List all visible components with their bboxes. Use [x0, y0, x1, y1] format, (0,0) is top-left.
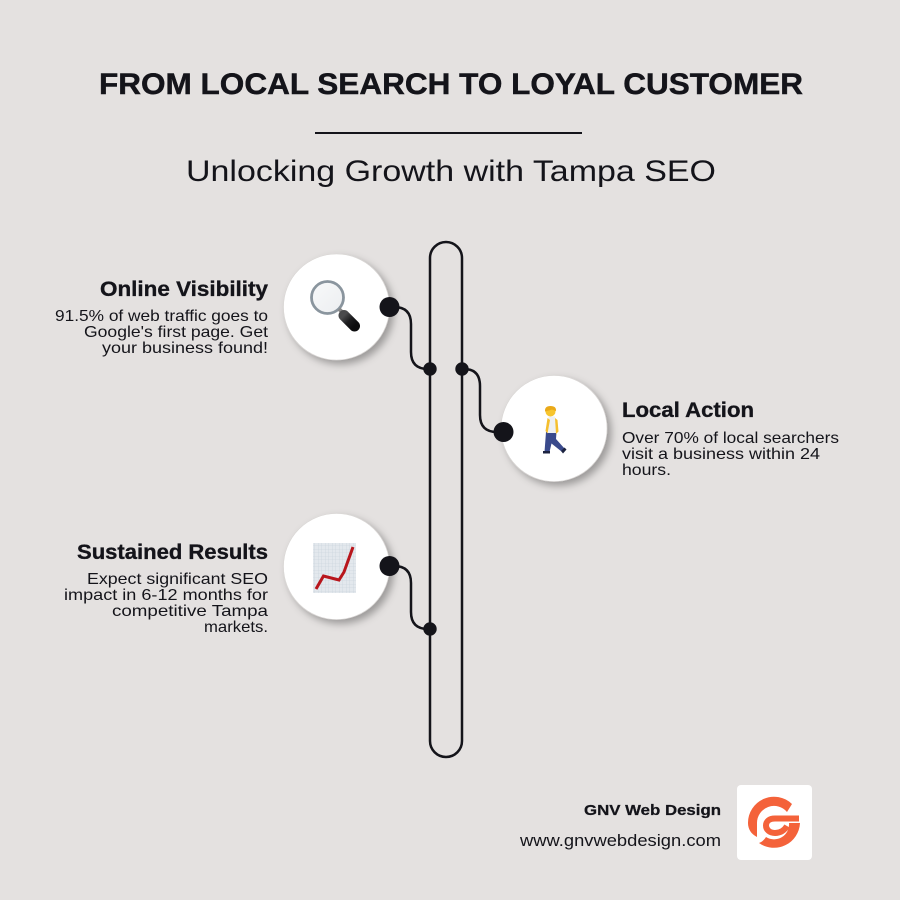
- online visibility text: [55, 308, 269, 357]
- central timeline pill: [430, 242, 462, 757]
- online visibility heading: Online Visibility: [100, 278, 268, 301]
- sustained results text: markets.: [204, 619, 268, 636]
- online visibility circle: [284, 254, 390, 360]
- connector: sustained results: [390, 566, 437, 636]
- local action circle: [501, 376, 607, 482]
- title divider: [315, 132, 582, 134]
- website: www.gnvwebdesign.com: [519, 832, 721, 850]
- brand name: GNV Web Design: [584, 802, 721, 819]
- footer brand: [519, 785, 812, 860]
- icon: magnifying glass: [312, 282, 354, 326]
- online visibility text: 91.5% of web traffic goes to: [55, 308, 268, 325]
- logo tile: [737, 785, 812, 860]
- panel: local action: [494, 376, 839, 482]
- sustained results text: impact in 6-12 months for: [64, 587, 269, 604]
- sustained results circle: [284, 514, 390, 620]
- local action node: [494, 422, 514, 442]
- sustained results text: competitive Tampa: [112, 603, 268, 620]
- online visibility node: [380, 297, 400, 317]
- local action text: hours.: [622, 462, 671, 479]
- panel: online visibility: [55, 254, 400, 360]
- online visibility text: Google's first page. Get: [84, 324, 269, 341]
- icon: G logo: [748, 797, 800, 848]
- sustained results node: [380, 556, 400, 576]
- title: FROM LOCAL SEARCH TO LOYAL CUSTOMER: [99, 68, 803, 101]
- connector: local action: [455, 362, 503, 432]
- local action text: visit a business within 24: [622, 446, 820, 463]
- local action heading: Local Action: [622, 399, 754, 422]
- connector: online visibility: [390, 307, 437, 376]
- panel: sustained results: [64, 514, 400, 636]
- sustained results text: Expect significant SEO: [87, 571, 268, 588]
- icon: chart increasing: [313, 543, 356, 593]
- local action text: [622, 430, 839, 479]
- icon: person walking: [543, 406, 566, 454]
- online visibility text: your business found!: [102, 340, 268, 357]
- sustained results heading: Sustained Results: [77, 541, 268, 564]
- sustained results text: [64, 571, 269, 636]
- subtitle: Unlocking Growth with Tampa SEO: [186, 155, 716, 188]
- local action text: Over 70% of local searchers: [622, 430, 839, 447]
